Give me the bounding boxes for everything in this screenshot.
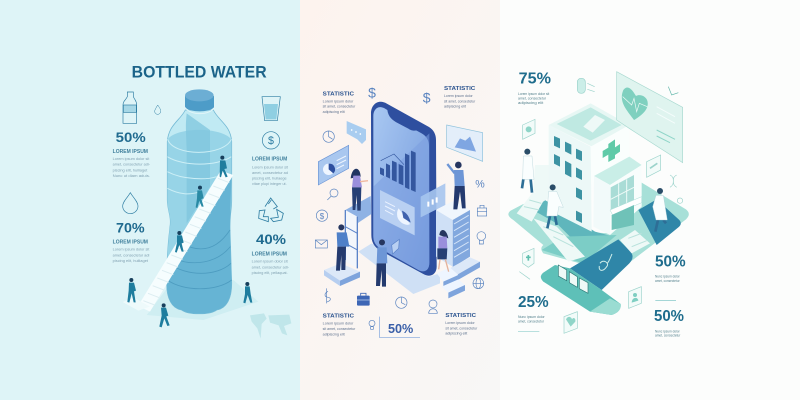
- people: [336, 162, 466, 287]
- icon: bottle outline: [123, 92, 137, 123]
- floating pie card left: [318, 145, 349, 185]
- stat: 50%: amet, consectetur adi-: [113, 163, 150, 167]
- stat: 50%: 50%: [116, 129, 146, 145]
- platform floor: [358, 243, 440, 294]
- stat: 50%: Nunc ut diam aduis.: [113, 174, 150, 178]
- stat: dollar text: LOREM IPSUM: [252, 157, 287, 163]
- stat: dollar text: [252, 157, 288, 186]
- 50% callout: 50%: [388, 322, 413, 336]
- floor shadow: [147, 280, 258, 320]
- stat: 70%: 70%: [116, 219, 145, 235]
- statistic: bottom right: adipiscing elit: [445, 332, 467, 336]
- statistic: top left: Lorem ipsum dolor: [323, 99, 354, 103]
- panel: bottled water: [113, 63, 291, 339]
- stat: 50% upper: amet, consectetur: [655, 279, 680, 283]
- stat: 75%: 75%: [519, 70, 551, 87]
- dollar and percent icons: [320, 84, 485, 221]
- statistic: bottom left: Lorem ipsum dolor: [323, 322, 354, 326]
- stat: 50% upper: 50%: [655, 254, 686, 271]
- stat: 75%: Lorem ipsum dolor sit: [518, 92, 549, 96]
- icon: water drop small: [155, 105, 161, 114]
- stat: 70%: amet, consectetur adi: [113, 253, 150, 257]
- base block and steps: [324, 257, 480, 298]
- stat: 75%: adipiscing elit: [518, 101, 543, 105]
- icon: recycle: [259, 198, 283, 222]
- stat: dollar text: amet, consectetur ad: [252, 171, 288, 175]
- statistic: top left: STATISTIC: [323, 91, 354, 97]
- statistic: bottom right: [445, 313, 478, 336]
- panel: phone statistics: [315, 84, 487, 337]
- icon: briefcase: [357, 293, 370, 306]
- statistic: bottom right: STATISTIC: [445, 313, 476, 319]
- heart card: [617, 72, 683, 163]
- staircase: [123, 171, 233, 312]
- statistic: bottom left: adipiscing elit: [323, 332, 345, 336]
- stat: 70%: LOREM IPSUM: [113, 240, 148, 246]
- title: BOTTLED WATER: [132, 63, 267, 82]
- stat: 25%: amet, consectetur: [518, 320, 544, 324]
- 50% callout: [379, 317, 420, 337]
- right tower platform: [436, 201, 470, 267]
- stat: dollar text: Lorem ipsum dolor sit: [252, 165, 288, 169]
- stat: 75%: amet, consectetur: [518, 96, 546, 100]
- icon: drop: [123, 193, 138, 214]
- statistic: top right: sit amet, consectetur: [444, 99, 476, 103]
- phone report card: [380, 190, 415, 235]
- statistic: top left: [323, 91, 356, 114]
- windows: [554, 136, 582, 223]
- stat: 50%: piscing elit, huiliaget: [113, 168, 147, 172]
- stat: 25%: 25%: [518, 294, 549, 311]
- dollar and percent icons: $: [320, 212, 325, 221]
- hospital building: [549, 103, 642, 235]
- green cross: [603, 139, 620, 162]
- stat: 75%: [518, 70, 551, 105]
- stat: 50%: [113, 129, 150, 178]
- stat: 25%: [518, 294, 549, 331]
- dollar and percent icons: %: [475, 178, 485, 190]
- statistic: top right: adipiscing elit: [444, 105, 466, 109]
- statistic: bottom left: sit amet, consectetur: [323, 327, 356, 331]
- left tower platform: [345, 196, 371, 268]
- stat: 70%: [113, 219, 150, 263]
- stat: 50% lower: amet, consectetur: [655, 334, 680, 338]
- stethoscope icon: [599, 254, 612, 270]
- stat: 40%: 40%: [256, 231, 287, 247]
- stat: 40%: piscing elit, pellaquat.: [252, 271, 288, 275]
- people on stairs: [127, 156, 252, 327]
- statistic: bottom left: [323, 314, 356, 336]
- stat: 40%: [252, 231, 289, 275]
- dollar and percent icons: $: [423, 90, 431, 106]
- floating card right of phone: [421, 183, 445, 217]
- stat: 40%: LOREM IPSUM: [252, 251, 287, 257]
- stat: 50% lower: 50%: [654, 308, 684, 325]
- panel: hospital: [508, 70, 689, 338]
- statistic: top left: adipiscing elit: [323, 110, 345, 114]
- stat: 70%: piscing elit, huiliaget: [113, 259, 148, 263]
- stat: 50% upper: Nunc ipsum dolor: [655, 275, 680, 279]
- stat: 50%: LOREM IPSUM: [113, 149, 148, 155]
- speech bubble: [347, 121, 366, 144]
- phone: [371, 102, 437, 276]
- stat: dollar text: vitae plupi integer ut.: [252, 182, 287, 186]
- floating chart card top right: [447, 125, 483, 161]
- bottle cap: [184, 89, 215, 114]
- statistic: bottom left: STATISTIC: [323, 314, 354, 320]
- phone bar chart: [380, 151, 416, 192]
- stat: 40%: amet, consectetur adi-: [252, 265, 289, 269]
- bridge windows: [558, 265, 588, 293]
- dollar and percent icons: $: [368, 84, 376, 100]
- stat: 50% upper: [655, 254, 686, 283]
- statistic: top right: STATISTIC: [444, 86, 475, 92]
- bottle: [167, 89, 232, 314]
- outline icons: [315, 131, 487, 329]
- statistic: bottom right: Lorem ipsum dolor: [445, 321, 476, 325]
- stat: dollar text: piscing elit, huilaege: [252, 176, 287, 180]
- stairs: [517, 165, 650, 262]
- icon: world map: [250, 313, 291, 339]
- statistic: top right: Lorem ipsum dolor: [444, 94, 473, 98]
- stat: 50% lower: [654, 300, 684, 338]
- stat: 50%: Lorem ipsum dolor sit: [113, 157, 149, 161]
- statistic: bottom right: sit amet, consectetur: [445, 326, 478, 330]
- icon: glass: [262, 97, 280, 121]
- stat: 50% lower: Nunc ipsum dolor: [655, 329, 680, 333]
- doctors: [522, 149, 667, 232]
- statistic: top left: sit amet, consectetur: [323, 105, 356, 109]
- statistic: top right: [444, 86, 476, 109]
- front wing: [593, 157, 642, 235]
- stat: 25%: Nunc ipsum dolor: [518, 315, 545, 319]
- icon: dollar coin: [262, 132, 280, 149]
- small icons: [519, 78, 683, 333]
- teal ground: [508, 182, 689, 315]
- icon: dollar coin: $: [268, 135, 274, 147]
- stat: 40%: Lorem ipsum dolor sit: [252, 260, 288, 264]
- stat: 70%: Lorem ipsum dolor sit: [113, 248, 149, 252]
